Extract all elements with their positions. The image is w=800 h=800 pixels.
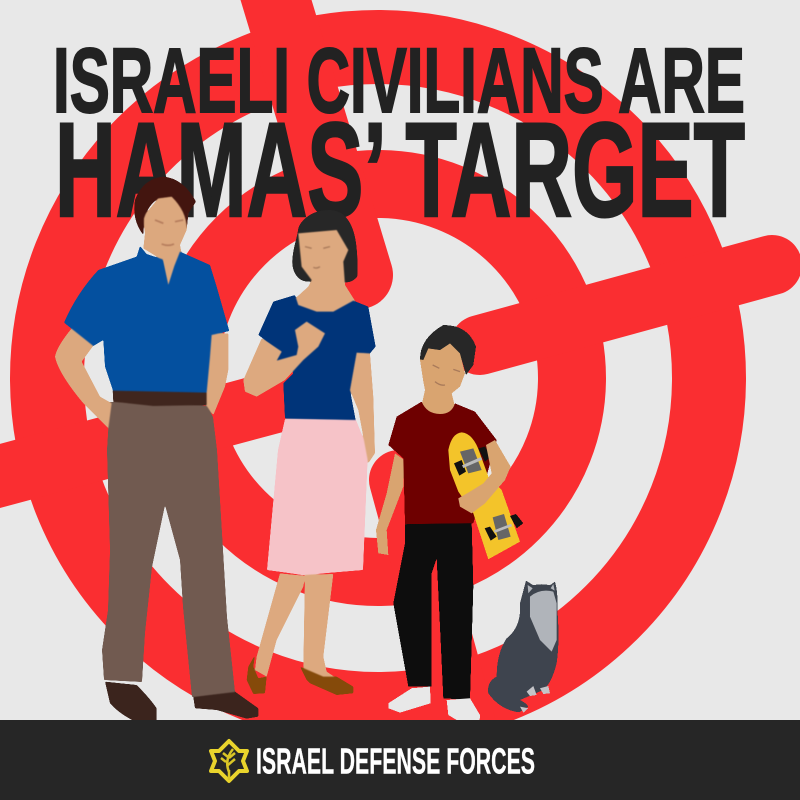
man belt	[113, 391, 207, 406]
woman features	[305, 247, 330, 268]
title	[53, 30, 745, 245]
woman neck and face	[292, 230, 357, 320]
skateboard	[448, 432, 523, 559]
skateboard bottom wheels	[485, 514, 523, 541]
boy shoes	[388, 687, 480, 726]
boy hair	[420, 325, 476, 375]
crosshair bar left	[0, 398, 290, 484]
boy trousers	[393, 523, 473, 700]
figure: man	[55, 177, 258, 724]
crosshair bar right	[480, 265, 772, 345]
skateboard bottom truck	[493, 514, 511, 540]
figure: woman	[243, 210, 376, 695]
woman hair	[292, 210, 357, 282]
man trousers	[102, 402, 235, 697]
man upper body	[55, 177, 229, 428]
outer ring	[47, 47, 709, 709]
man neck and face	[143, 197, 188, 285]
boy features	[433, 365, 460, 385]
skateboard top truck	[460, 448, 482, 473]
man features	[155, 220, 183, 245]
man shirt	[64, 246, 229, 393]
cat face and chest	[530, 591, 557, 652]
crosshair bar top	[270, 0, 359, 275]
woman shirt	[258, 295, 376, 420]
footer band	[0, 720, 800, 800]
woman shoes	[247, 655, 353, 695]
woman left arm and hand	[243, 322, 325, 397]
cat ears inner	[528, 584, 555, 593]
woman upper body	[243, 210, 376, 463]
skateboard bottom axle	[494, 525, 512, 532]
footer text: ISRAEL DEFENSE FORCES	[256, 740, 535, 782]
woman legs	[255, 573, 337, 680]
boy right arm	[458, 440, 511, 513]
emblem branch	[221, 749, 235, 780]
boy shirt	[388, 402, 497, 524]
woman skirt	[267, 419, 368, 575]
emblem star	[211, 741, 247, 781]
man hair	[134, 177, 196, 235]
inner ring	[184, 184, 572, 572]
footer background	[0, 720, 800, 800]
cat body	[488, 581, 558, 712]
woman right arm	[350, 353, 375, 463]
man shoes	[105, 682, 258, 724]
skateboard deck	[448, 432, 520, 559]
man arms	[55, 328, 228, 428]
cat paws	[520, 686, 550, 713]
figure: boy with skateboard	[376, 325, 523, 726]
icon: cat	[488, 581, 558, 713]
boy left arm	[376, 453, 404, 555]
boy neck and face	[420, 343, 465, 420]
skateboard top axle	[463, 458, 482, 467]
icon: star emblem	[211, 741, 247, 781]
skateboard top wheels	[454, 447, 491, 476]
crosshair bar bottom	[399, 480, 470, 740]
